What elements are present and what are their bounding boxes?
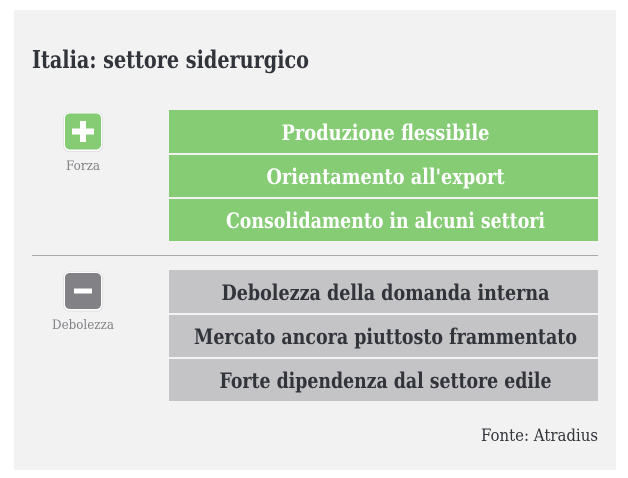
panel: strengths: [169, 110, 598, 241]
icon: minus: [63, 272, 103, 312]
weakness bar 2: [169, 315, 598, 357]
strength bar 2: [169, 155, 598, 197]
source: Fonte: Atradius: [481, 426, 598, 446]
icon: plus: [63, 112, 103, 152]
title: Italia: settore siderurgico: [32, 45, 309, 74]
label: Debolezza: Debolezza: [52, 318, 114, 333]
panel: weaknesses: [169, 270, 598, 401]
strength bar 3: [169, 199, 598, 241]
label: Forza: Forza: [66, 159, 100, 174]
strength bar 1: Produzione flessibile: [282, 120, 490, 145]
weakness bar 1: Debolezza della domanda interna: [222, 280, 550, 305]
weakness bar 3: Forte dipendenza dal settore edile: [220, 368, 552, 393]
strength bar 3: Consolidamento in alcuni settori: [226, 208, 545, 233]
weakness bar 3: [169, 359, 598, 401]
strength bar 1: [169, 110, 598, 153]
weakness bar 1: [169, 270, 598, 313]
strength bar 2: Orientamento all'export: [266, 164, 505, 189]
